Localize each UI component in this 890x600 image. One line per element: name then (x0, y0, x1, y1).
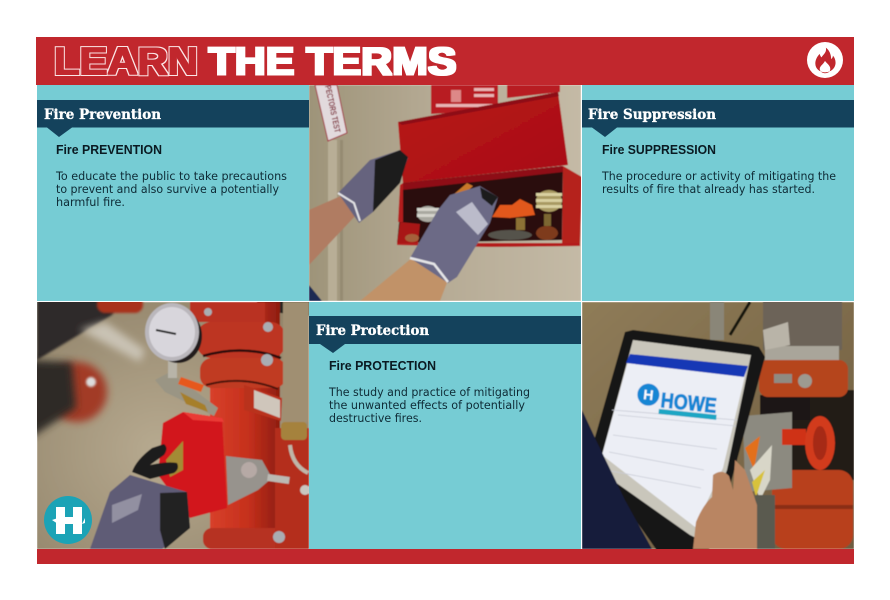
definition: fire prevention: To educate the public to take precautions (55, 169, 287, 183)
valve and pressure gauge (145, 303, 218, 416)
open red box (397, 92, 582, 247)
heading band: fire prevention: Fire Prevention (44, 107, 161, 123)
definition: fire protection: destructive fires. (329, 411, 422, 425)
title: LEARN: LEARN (54, 40, 198, 84)
photo: tablet inspection form (582, 296, 854, 562)
bracket (226, 456, 290, 505)
definition: fire protection (328, 385, 530, 425)
definition: fire suppression: results of fire that already has started. (602, 182, 815, 196)
glove on box (90, 444, 190, 549)
inspector's test tag: PECTORS TEST (323, 84, 343, 134)
subheading: fire protection: Fire PROTECTION (329, 358, 436, 373)
Howe logo on screen: HOWE (660, 389, 718, 418)
right arm and glove (360, 186, 498, 301)
heading band: fire protection: Fire Protection (316, 323, 429, 339)
sprinkler heads (405, 183, 562, 242)
inspector's test tag (315, 84, 347, 141)
icon: flame badge (807, 42, 843, 78)
header banner (36, 37, 854, 85)
definition: fire protection: The study and practice of mitigating (328, 385, 530, 399)
definition: fire protection: the unwanted effects of potentially (329, 398, 525, 412)
panel: fire suppression (582, 85, 854, 301)
Howe H logo badge (44, 496, 92, 544)
definition: fire suppression: The procedure or activity of mitigating the (601, 169, 836, 183)
person's shoulder (582, 410, 652, 549)
Howe logo on screen (636, 383, 719, 420)
subheading: fire prevention: Fire PREVENTION (56, 142, 162, 157)
title: THE TERMS: THE TERMS (208, 40, 456, 84)
heading band: fire prevention (37, 100, 309, 137)
photo: gloved hands opening red sprinkler box (309, 84, 582, 301)
valve machinery (710, 296, 854, 549)
heading band: fire suppression (582, 100, 854, 137)
definition: fire prevention: to prevent and also survive a potentially (56, 182, 279, 196)
hand holding tablet (693, 460, 757, 549)
photo: gauge and red sprinkler riser (30, 296, 312, 549)
definition: fire prevention (55, 169, 287, 209)
definition: fire prevention: harmful fire. (56, 195, 125, 209)
subheading: fire suppression: Fire SUPPRESSION (602, 142, 716, 157)
left arm and glove (309, 150, 408, 265)
red riser pipe (190, 302, 310, 549)
heading band: fire protection (309, 316, 581, 353)
panel: fire protection (309, 302, 581, 549)
heading band: fire suppression: Fire Suppression (588, 107, 716, 123)
red tamper box (158, 412, 227, 518)
panel: fire prevention (37, 85, 309, 301)
definition: fire suppression (601, 169, 836, 196)
tablet (590, 330, 765, 562)
footer bar (37, 549, 854, 564)
Howe logo on screen: H (643, 386, 654, 403)
blurred background pipes (30, 296, 312, 438)
red instruction signs (431, 85, 560, 114)
